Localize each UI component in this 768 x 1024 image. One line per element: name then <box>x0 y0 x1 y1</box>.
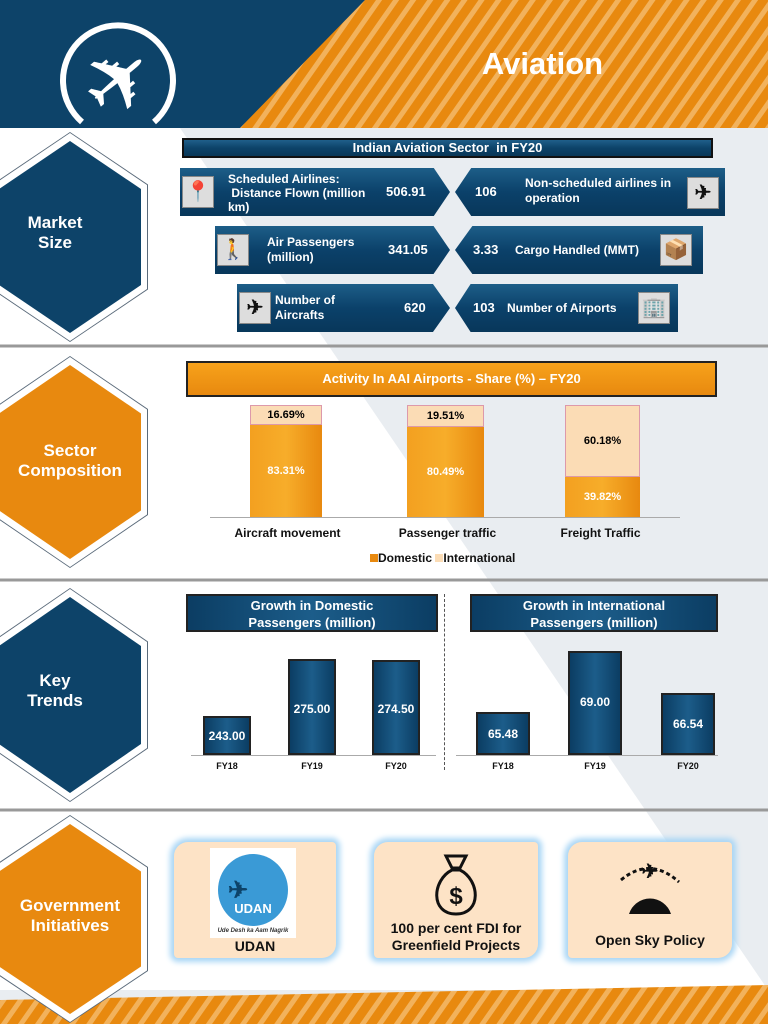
card: FDI: 100 per cent FDI for <box>391 920 521 936</box>
chart: domestic passengers: FY18 <box>216 761 238 771</box>
stat: passengers: (million) <box>267 250 314 264</box>
icon: UDAN logo <box>210 848 296 938</box>
icon: open sky: ✈ <box>642 861 659 883</box>
hexagon: Market Size: Size <box>38 233 72 252</box>
hexagon: Market Size: Market <box>28 213 82 232</box>
icon: UDAN logo: Ude Desh ka Aam Nagrik <box>218 928 288 934</box>
chart: domestic passengers: 243.00 <box>209 729 245 743</box>
chart: domestic passengers: FY19 <box>301 761 323 771</box>
card: UDAN <box>174 842 336 958</box>
card: FDI <box>374 842 538 958</box>
stat: distance flown: Scheduled Airlines: <box>228 172 340 186</box>
hexagon: Government Initiatives: Initiatives <box>31 916 109 935</box>
stat: aircrafts: ✈ <box>247 297 263 319</box>
chart: international passengers: Passengers (million) <box>530 615 658 630</box>
chart: stacked bars <box>210 405 680 565</box>
chart: stacked bars: 19.51% <box>427 410 464 422</box>
chart: international passengers: Growth in International <box>523 598 665 613</box>
heading: Activity in AAI airports <box>186 361 717 397</box>
icon: UDAN logo: UDAN <box>234 901 272 916</box>
stat: non-scheduled: 106 <box>475 184 497 199</box>
panel: market stats <box>180 168 725 332</box>
stat: non-scheduled: Non-scheduled airlines in operation <box>525 176 671 205</box>
hexagon: Market Size <box>0 132 148 342</box>
chart: domestic passengers: 275.00 <box>294 702 330 716</box>
stat: non-scheduled: ✈ <box>695 182 711 204</box>
stat: cargo: Cargo Handled (MMT) <box>515 243 639 257</box>
hexagon: Key Trends: Trends <box>27 691 83 710</box>
chart: stacked bars: 60.18% <box>584 435 621 447</box>
icon: UDAN logo: ✈ <box>228 877 248 904</box>
chart: international passengers <box>456 594 718 771</box>
stat: airports: Number of Airports <box>507 301 617 315</box>
chart: international passengers: 69.00 <box>580 695 610 709</box>
heading: Activity in AAI airports: Activity In AAI Airports - Share (%) – FY20 <box>322 371 581 386</box>
hexagon: Sector Composition: Composition <box>18 461 122 480</box>
chart: international passengers: FY20 <box>677 761 699 771</box>
card: UDAN: UDAN <box>235 938 275 954</box>
stat: airports: 103 <box>473 300 495 315</box>
stat: cargo <box>455 226 703 274</box>
stat: aircrafts: Number of <box>275 293 335 307</box>
icon: open sky <box>620 861 680 914</box>
chart: stacked bars: 16.69% <box>267 409 305 421</box>
stat: passengers: 🚶 <box>221 239 245 261</box>
chart: international passengers: FY19 <box>584 761 606 771</box>
chart: domestic passengers: Growth in Domestic <box>251 598 373 613</box>
stat: distance flown: 506.91 <box>386 184 426 199</box>
stat: cargo: 📦 <box>664 239 688 261</box>
heading: Indian Aviation Sector <box>182 138 713 158</box>
stat: distance flown: Distance Flown (million km) <box>228 186 365 214</box>
stat: passengers: 341.05 <box>388 242 428 257</box>
stat: airports: 🏢 <box>642 297 666 319</box>
chart: domestic passengers <box>186 594 438 771</box>
hexagon: Sector Composition: Sector <box>44 441 96 460</box>
chart: domestic passengers: Passengers (million) <box>248 615 376 630</box>
hexagon: Sector Composition <box>0 356 148 568</box>
chart: stacked bars: Domestic International <box>378 551 515 565</box>
chart: international passengers: 66.54 <box>673 717 703 731</box>
chart: stacked bars: Passenger traffic <box>399 526 496 540</box>
stat: passengers <box>215 226 450 274</box>
card: Open Sky <box>568 842 732 958</box>
chart: stacked bars: 80.49% <box>427 466 464 478</box>
chart: international passengers: 65.48 <box>488 727 518 741</box>
stat: aircrafts <box>237 284 450 332</box>
chart: stacked bars: Aircraft movement <box>234 526 341 540</box>
stat: distance flown <box>180 168 450 216</box>
icon: money bag <box>435 854 477 916</box>
hexagon: Key Trends <box>0 588 148 802</box>
hexagon: Key Trends: Key <box>39 671 71 690</box>
stat: cargo: 3.33 <box>473 242 498 257</box>
chart: domestic passengers: FY20 <box>385 761 407 771</box>
stat: aircrafts: Aircrafts <box>275 308 324 322</box>
icon: money bag: $ <box>449 883 463 910</box>
stat: passengers: Air Passengers <box>267 235 354 249</box>
chart: stacked bars: 83.31% <box>267 465 305 477</box>
hexagon: Government Initiatives <box>0 815 148 1023</box>
stat: airports <box>455 284 678 332</box>
chart: stacked bars: Freight Traffic <box>560 526 640 540</box>
chart: domestic passengers: 274.50 <box>378 702 414 716</box>
chart: stacked bars: 39.82% <box>584 491 621 503</box>
chart: international passengers: FY18 <box>492 761 514 771</box>
title: Aviation <box>482 46 603 81</box>
heading: Indian Aviation Sector: Indian Aviation Sector in FY20 <box>353 140 542 155</box>
card: FDI: Greenfield Projects <box>392 937 520 953</box>
stat: non-scheduled <box>455 168 725 216</box>
card: Open Sky: Open Sky Policy <box>595 932 705 948</box>
hexagon: Government Initiatives: Government <box>20 896 120 915</box>
stat: aircrafts: 620 <box>404 300 426 315</box>
stat: distance flown: 📍 <box>186 181 210 203</box>
